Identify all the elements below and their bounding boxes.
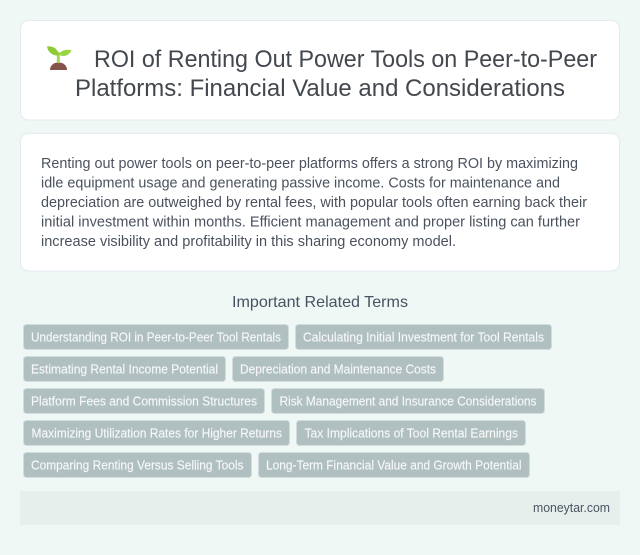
chip: Tax Implications of Tool Rental Earnings bbox=[304, 426, 518, 440]
footer bbox=[20, 491, 620, 525]
chip: Depreciation and Maintenance Costs bbox=[240, 362, 436, 376]
title: Platforms: Financial Value and Considerations bbox=[75, 75, 565, 102]
title bbox=[75, 46, 597, 102]
chip bbox=[232, 356, 444, 382]
chip bbox=[24, 420, 290, 446]
summary paragraph: Renting out power tools on peer-to-peer platforms offers a strong ROI by maximizing bbox=[41, 155, 578, 172]
chip: Long-Term Financial Value and Growth Potential bbox=[266, 458, 522, 472]
icon: sprout bbox=[47, 46, 72, 70]
chip: Maximizing Utilization Rates for Higher Returns bbox=[32, 426, 282, 440]
footer site name: moneytar.com bbox=[533, 501, 610, 515]
chip: Understanding ROI in Peer-to-Peer Tool Rentals bbox=[31, 330, 281, 344]
summary paragraph: increase visibility and profitability in this sharing economy model. bbox=[41, 233, 456, 250]
chip bbox=[24, 388, 264, 414]
panel: title card bbox=[20, 20, 620, 120]
heading: related terms: Important Related Terms bbox=[232, 294, 408, 311]
chip: Comparing Renting Versus Selling Tools bbox=[31, 458, 244, 472]
summary paragraph bbox=[41, 155, 587, 250]
chip bbox=[24, 324, 288, 350]
summary paragraph: idle equipment usage and generating passive income. Costs for maintenance and bbox=[41, 174, 560, 192]
summary paragraph: depreciation are outweighed by rental fees, with popular tools often earning back their bbox=[41, 194, 587, 211]
summary paragraph: initial investment within months. Efficient management and proper listing can further bbox=[41, 214, 580, 230]
chip: Risk Management and Insurance Considerations bbox=[280, 394, 537, 408]
chip bbox=[24, 356, 226, 382]
related terms chips bbox=[24, 324, 552, 478]
chip bbox=[296, 420, 526, 446]
chip bbox=[296, 324, 552, 350]
title: ROI of Renting Out Power Tools on Peer-to-Peer bbox=[94, 46, 597, 73]
chip: Calculating Initial Investment for Tool Rentals bbox=[303, 330, 544, 344]
chip: Platform Fees and Commission Structures bbox=[31, 394, 257, 408]
chip: Estimating Rental Income Potential bbox=[31, 362, 218, 376]
panel: summary card bbox=[20, 134, 620, 271]
chip bbox=[258, 452, 530, 478]
chip bbox=[24, 452, 252, 478]
chip bbox=[272, 388, 544, 414]
